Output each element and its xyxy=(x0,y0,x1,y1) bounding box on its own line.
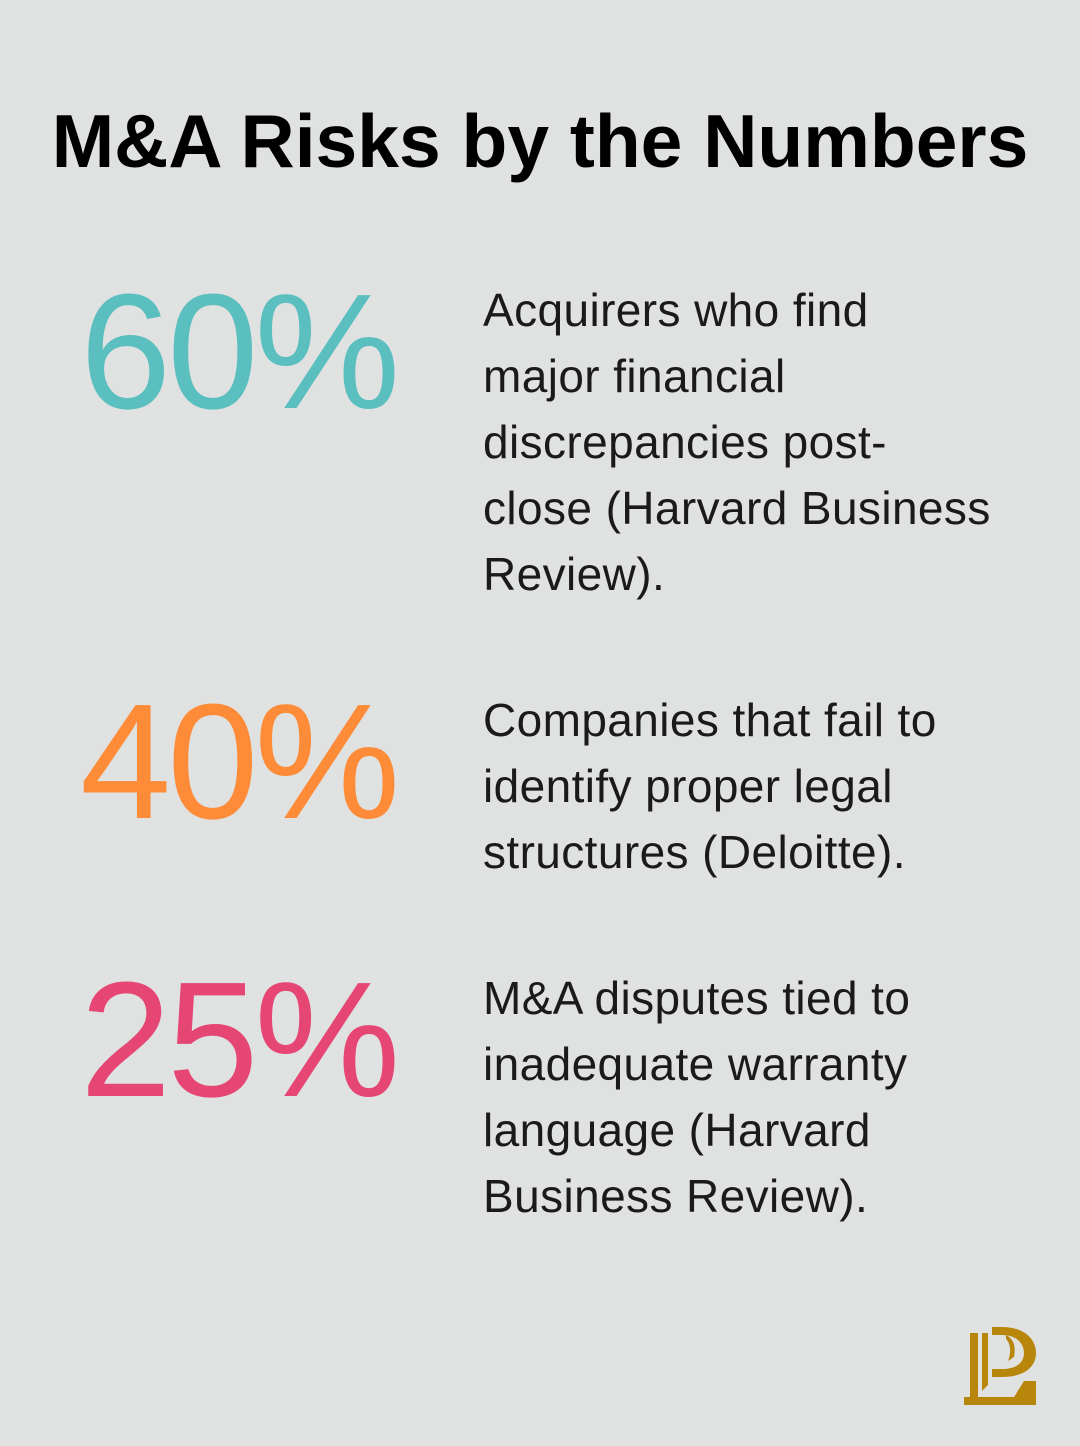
description: 60%: major financial xyxy=(483,350,786,402)
description: 60%: Review). xyxy=(483,548,665,600)
logo xyxy=(964,1327,1036,1405)
description: 60% xyxy=(483,284,991,600)
description: 40%: Companies that fail to xyxy=(483,694,937,746)
description: 40% xyxy=(483,694,937,878)
description: 25% xyxy=(483,972,910,1222)
title: M&A Risks by the Numbers xyxy=(52,99,1028,183)
description: 40%: structures (Deloitte). xyxy=(483,826,906,878)
description: 25%: inadequate warranty xyxy=(483,1038,907,1090)
description: 25%: language (Harvard xyxy=(483,1104,871,1156)
description: 25%: M&A disputes tied to xyxy=(483,972,910,1024)
description: 60%: discrepancies post- xyxy=(483,416,887,468)
stat: 60%: 60% xyxy=(80,260,396,443)
description: 40%: identify proper legal xyxy=(483,760,893,812)
description: 25%: Business Review). xyxy=(483,1170,868,1222)
description: 60%: close (Harvard Business xyxy=(483,482,991,534)
stat: 40%: 40% xyxy=(80,670,396,853)
stat: 25%: 25% xyxy=(80,948,396,1131)
description: 60%: Acquirers who find xyxy=(483,284,869,336)
